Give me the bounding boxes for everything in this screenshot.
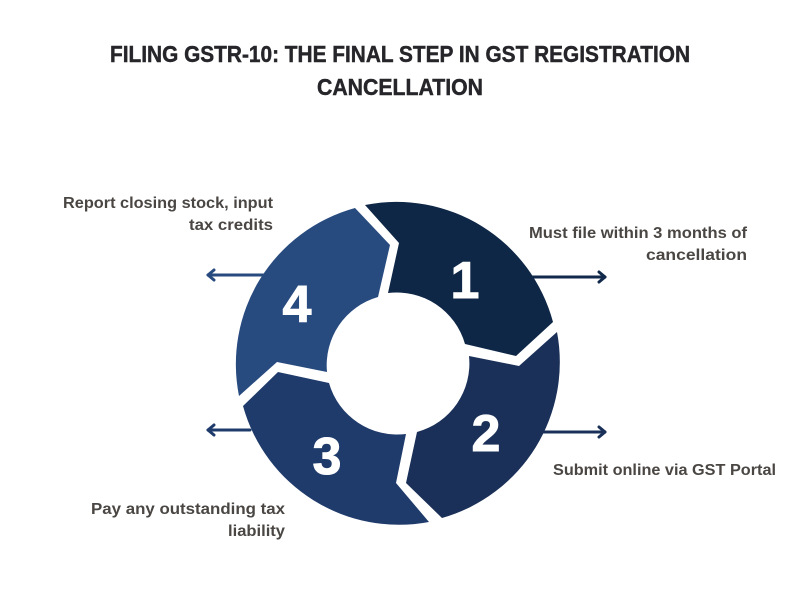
label: step 3 [91, 501, 285, 540]
arrow: step 1 [530, 272, 605, 282]
segment 3 [243, 372, 429, 525]
title: CANCELLATION [317, 74, 483, 100]
title [110, 41, 690, 100]
label: step 1: Must file within 3 months of [529, 225, 748, 242]
number 1: 1 [451, 252, 479, 310]
number 4: 4 [283, 276, 312, 334]
label: step 3: Pay any outstanding tax [91, 501, 285, 518]
cycle diagram [236, 202, 560, 525]
segment 2 [406, 332, 560, 518]
number 3: 3 [313, 428, 341, 486]
label: step 1: cancellation [646, 247, 747, 264]
label: step 4: tax credits [189, 217, 273, 234]
arrow: step 3 [208, 425, 250, 435]
title: FILING GSTR-10: THE FINAL STEP IN GST REGISTRATION [110, 41, 690, 67]
number 2: 2 [472, 405, 500, 463]
label: step 4: Report closing stock, input [63, 195, 274, 212]
segment 4 [236, 208, 390, 396]
arrow: step 4 [208, 270, 268, 280]
arrow: step 2 [540, 427, 605, 437]
label: step 2: Submit online via GST Portal [553, 462, 776, 479]
label: step 1 [529, 225, 748, 264]
label: step 3: liability [228, 523, 285, 540]
segment 1 [365, 202, 553, 356]
label: step 4 [63, 195, 274, 234]
